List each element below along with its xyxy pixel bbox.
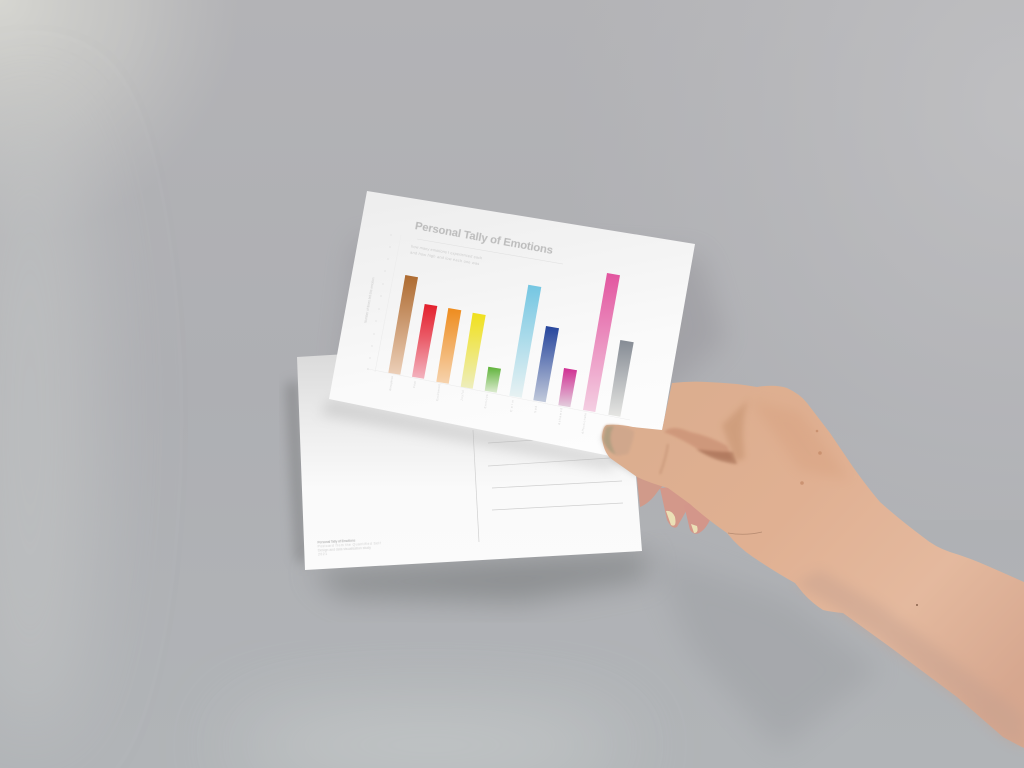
subtitle: and how high and low each one was — [410, 251, 480, 266]
x axis baseline — [368, 369, 630, 420]
panel: front of postcard with bar chart — [329, 191, 695, 462]
bar: joy — [436, 308, 461, 384]
shadow: front card on back card — [320, 399, 620, 470]
credit text: Postcard from the Quantified Self — [318, 541, 381, 548]
credit text: Personal Tally of Emotions — [317, 539, 356, 544]
bar: shame — [558, 368, 577, 407]
credit text: 2021 — [318, 552, 327, 556]
wrist crease — [728, 532, 762, 534]
y axis label: Number of times felt this emotion — [364, 277, 376, 323]
x axis labels: Affectionate — [581, 412, 587, 434]
x axis labels: Calm — [509, 399, 515, 412]
credit text — [317, 537, 381, 556]
bar: sadness — [533, 326, 559, 402]
upper hand tone — [750, 400, 850, 480]
y axis — [364, 234, 401, 372]
title: Personal Tally of Emotions — [414, 220, 554, 257]
x axis labels: Sad — [533, 405, 538, 413]
bar: anger — [388, 275, 418, 375]
dark gap under index finger — [696, 449, 737, 464]
bar: apathy — [608, 340, 634, 417]
shadow: cast by cards and hand on the wall — [286, 240, 880, 750]
shadow: thumb on card — [600, 436, 640, 478]
index finger fold — [664, 428, 733, 460]
x axis labels: Envious — [483, 394, 489, 409]
credit text: Design and data visualisation study — [318, 546, 371, 552]
x axis labels: Annoyance — [388, 375, 394, 391]
address divider — [473, 430, 479, 542]
thumb nail — [602, 425, 634, 456]
panel: back of postcard — [297, 337, 642, 570]
bar: envy — [485, 367, 501, 393]
x axis labels: Fear — [412, 381, 417, 388]
bar: fear — [412, 304, 437, 379]
freckles — [800, 430, 918, 606]
x axis labels: Excitement — [435, 384, 441, 401]
thumb crease — [660, 444, 668, 474]
address lines — [488, 440, 623, 510]
lower wrist tone — [795, 570, 1024, 748]
hand silhouette — [602, 382, 1024, 748]
subtitle: how many emotions I experienced each — [411, 245, 483, 260]
bar chart — [388, 273, 634, 417]
knuckle shadow — [722, 400, 748, 462]
bar: calm — [509, 285, 541, 398]
title rule — [417, 239, 563, 264]
bar: hope — [461, 313, 486, 389]
fingers behind the cards — [636, 470, 710, 534]
x axis labels — [388, 375, 587, 434]
icon: hand and forearm holding the cards — [602, 382, 1024, 748]
x axis labels: Ashamed — [557, 407, 563, 425]
x axis labels: Joyful — [460, 389, 465, 401]
bar: love — [583, 273, 620, 412]
